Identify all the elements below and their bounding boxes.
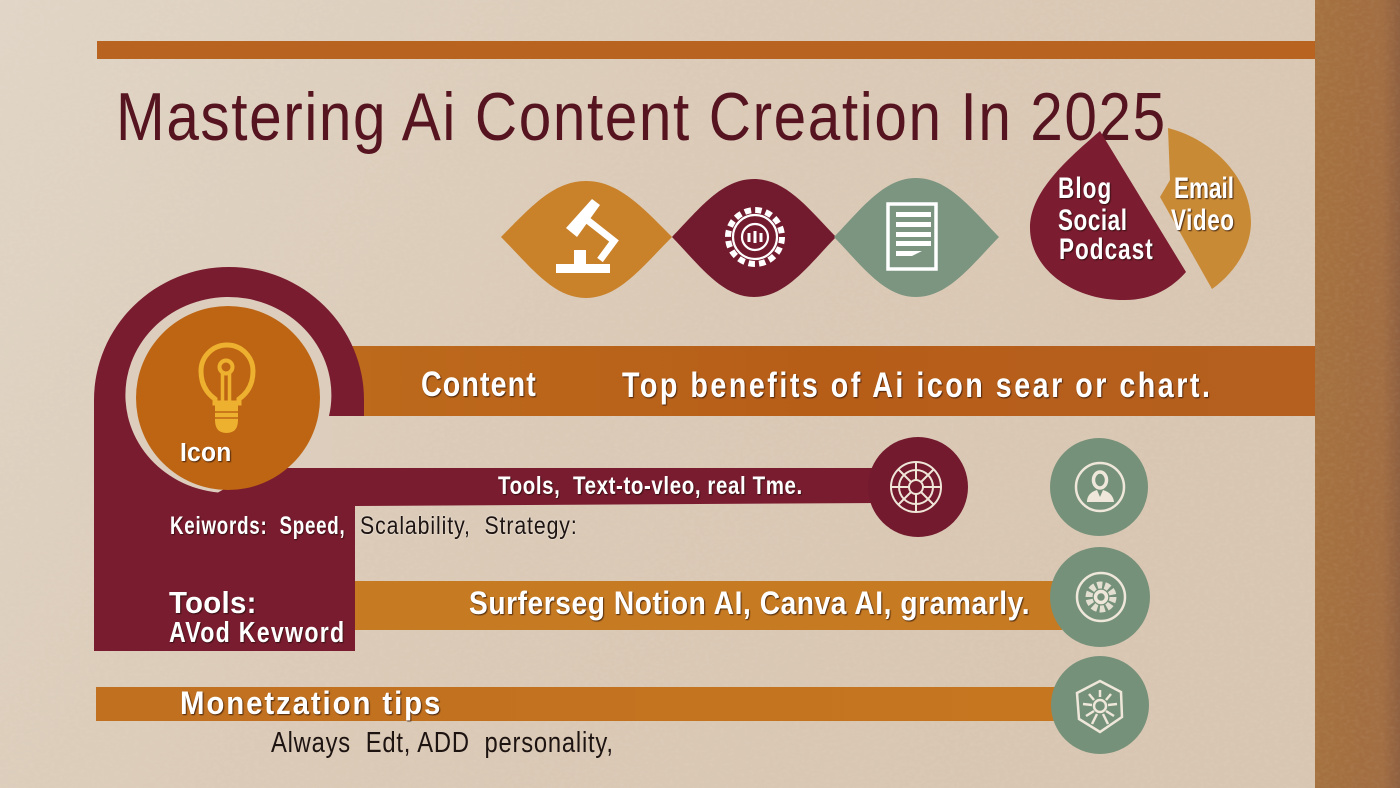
- content bar: [350, 346, 1315, 416]
- monetization bar: [96, 687, 1062, 721]
- icon: wheel: [891, 462, 941, 512]
- label: avoid keyword: AVod Kevword: [169, 615, 344, 649]
- node: hexagon sun: [1051, 656, 1149, 754]
- title: Mastering Ai Content Creation In 2025: [116, 80, 1165, 155]
- content bar label: Content: [421, 364, 536, 404]
- node: maroon wheel: [868, 437, 968, 537]
- icon: gear: [1077, 573, 1125, 621]
- panel: content formats pie: [1030, 128, 1251, 300]
- icon: gear with people: [728, 210, 782, 264]
- labels: Email, Video: [1171, 171, 1234, 237]
- node: person: [1050, 438, 1148, 536]
- labels: Blog, Social, Podcast: [1058, 171, 1153, 266]
- label: keywords: Keiwords: Speed,: [170, 511, 345, 540]
- diamond: microscope: [501, 181, 672, 298]
- labels: Blog, Social, Podcast: Social: [1058, 203, 1127, 237]
- process diamonds row: [501, 178, 999, 298]
- wedge: orange formats: [1160, 128, 1251, 289]
- labels: Email, Video: Email: [1174, 171, 1234, 205]
- tools bar orange: [350, 581, 1062, 630]
- tools list text: Surferseg Notion AI, Canva AI, gramarly.: [469, 586, 1030, 621]
- monetization heading: Monetzation tips: [180, 685, 440, 721]
- cream ring: [125, 297, 332, 492]
- icon: hexagon sun: [1077, 681, 1122, 732]
- maroon arch panel: [94, 267, 880, 651]
- icon: person: [1076, 463, 1124, 511]
- labels: Blog, Social, Podcast: Blog: [1058, 171, 1111, 205]
- label: tools: Tools:: [169, 586, 256, 620]
- icon: microscope: [556, 199, 614, 273]
- icon: document: [888, 204, 936, 269]
- node: gear: [1050, 547, 1150, 647]
- benefits text: Top benefits of Ai icon sear or chart.: [622, 365, 1210, 405]
- labels: Email, Video: Video: [1171, 203, 1234, 237]
- keywords continuation: Scalability, Strategy:: [360, 511, 577, 539]
- diamond: gear and people: [672, 179, 836, 297]
- labels: Blog, Social, Podcast: Podcast: [1059, 232, 1153, 266]
- wedge: maroon formats: [1030, 131, 1186, 300]
- orange circle: [136, 306, 320, 490]
- monetization text: Always Edt, ADD personality,: [271, 726, 613, 759]
- label: Icon: Icon: [180, 438, 231, 467]
- top rule bar: [97, 41, 1315, 59]
- right brown strip: [1315, 0, 1400, 788]
- icon: light bulb: [201, 345, 253, 433]
- tools maroon bar text: Tools, Text-to-vleo, real Tme.: [498, 471, 802, 499]
- diamond: document: [834, 178, 999, 297]
